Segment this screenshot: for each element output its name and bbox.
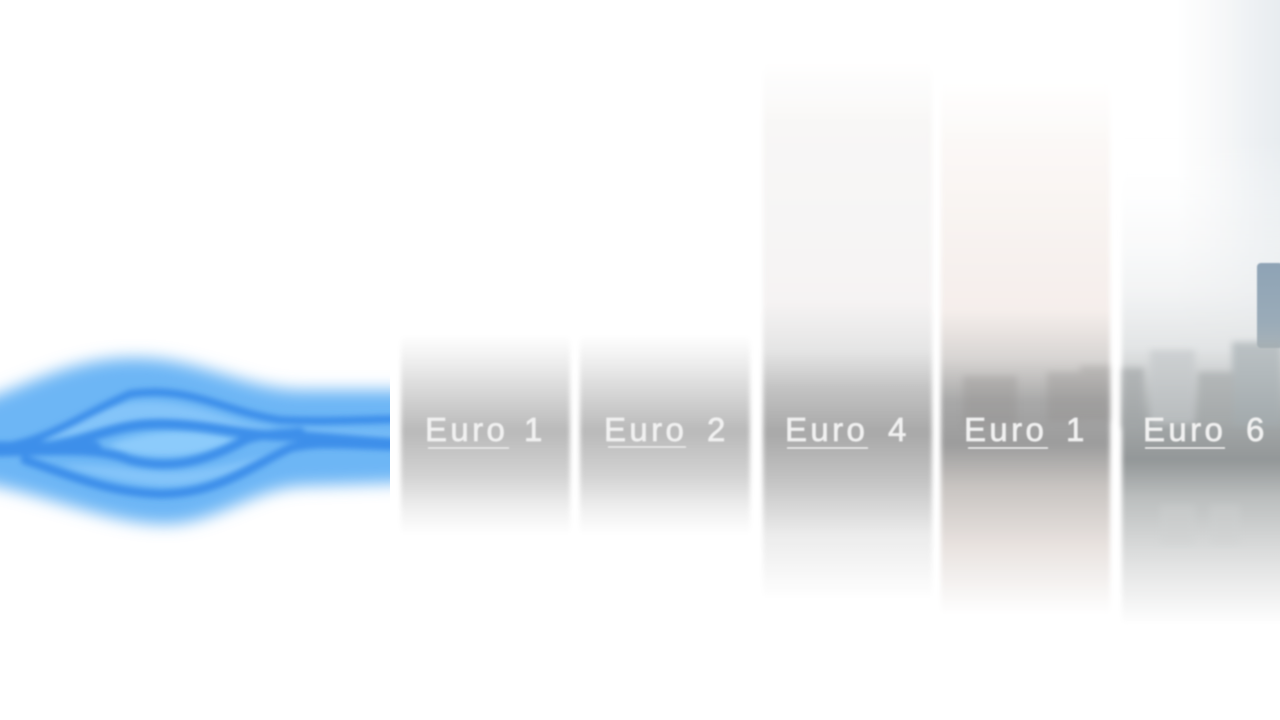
panel: Euro 1: [401, 335, 570, 535]
tall tower: [1257, 263, 1280, 348]
panel background: [401, 335, 570, 535]
label: Euro: [785, 411, 868, 448]
flow dark strands: [0, 392, 405, 494]
number: 6: [1246, 411, 1268, 448]
reflection: [1160, 505, 1240, 545]
clean air flow: blue stream: [0, 358, 420, 524]
hazy buildings: [963, 366, 1110, 426]
number: 4: [888, 411, 910, 448]
underline: [968, 447, 1048, 449]
label: Euro: [964, 411, 1047, 448]
underline: [608, 446, 686, 448]
label: Euro: [425, 411, 508, 448]
panel background: [580, 335, 750, 535]
flow lighter bands: [52, 401, 386, 486]
panel: Euro 6: [1122, 140, 1280, 625]
panel: Euro 2: [580, 335, 750, 535]
label: Euro: [604, 411, 687, 448]
panel background: [763, 60, 932, 600]
underline: [428, 447, 509, 449]
underline: [1145, 447, 1225, 449]
hazy buildings: [1122, 342, 1280, 428]
number: 2: [707, 411, 729, 448]
number: 1: [1066, 411, 1088, 448]
background haze: hazy sky at right: [1175, 0, 1280, 400]
label: Euro: [1143, 411, 1226, 448]
flow outer glow: [0, 358, 420, 524]
number: 1: [524, 411, 546, 448]
city skyline in smog: [1122, 263, 1280, 428]
panel background: [1122, 140, 1280, 625]
underline: [787, 447, 868, 449]
panel: Euro 4: [763, 60, 932, 600]
panel background: [941, 80, 1110, 615]
panel: Euro 1 (fourth column): [941, 80, 1110, 615]
